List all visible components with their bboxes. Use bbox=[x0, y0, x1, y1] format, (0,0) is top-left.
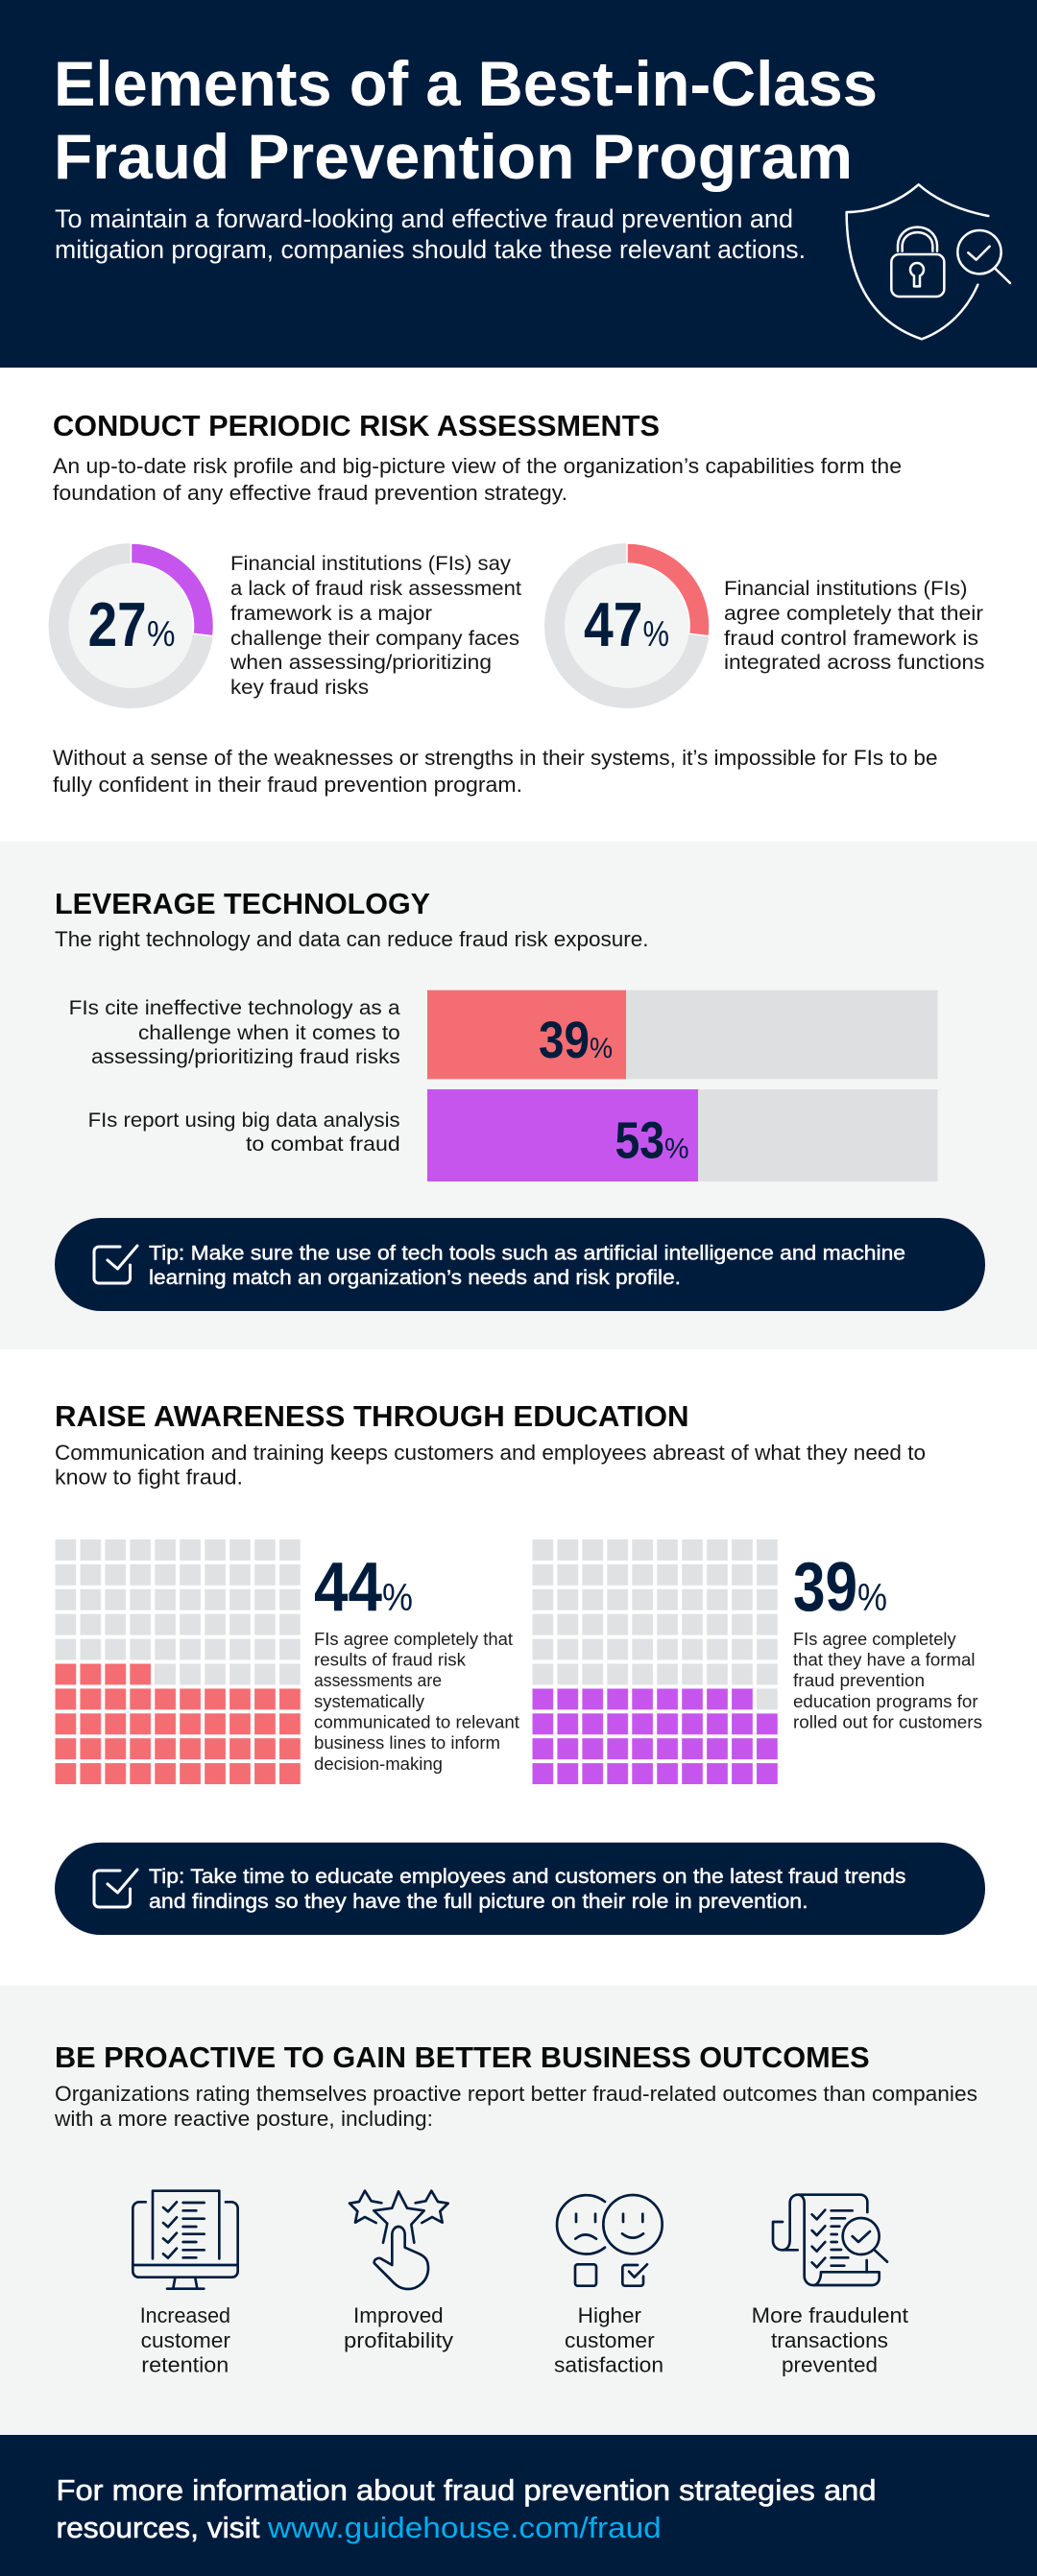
label: fraudulent transactions: More fraudulent bbox=[752, 2303, 908, 2327]
intro text: An up-to-date risk profile and big-picture view of the organization’s capabilities form the bbox=[53, 454, 902, 478]
title: Elements of a Best-in-Class bbox=[54, 48, 878, 119]
stat: 39%: 39 bbox=[793, 1549, 857, 1626]
intro text: The right technology and data can reduce fraud risk exposure. bbox=[55, 927, 649, 951]
panel: footer bbox=[0, 2435, 1037, 2576]
stat text: 39%: FIs agree completely bbox=[793, 1630, 956, 1649]
donut text: 27% bbox=[229, 552, 521, 699]
header subtitle: mitigation program, companies should take these relevant actions. bbox=[55, 235, 806, 264]
label: profitability: profitability bbox=[344, 2328, 453, 2352]
label: customer satisfaction bbox=[554, 2303, 663, 2377]
stat text: 44%: results of fraud risk bbox=[314, 1651, 467, 1670]
donut text: 27%: key fraud risks bbox=[230, 676, 369, 699]
icon: scroll with magnifier bbox=[773, 2195, 887, 2285]
label: customer satisfaction: satisfaction bbox=[554, 2353, 663, 2377]
label: customer retention: customer bbox=[141, 2328, 230, 2352]
stat text: 44%: systematically bbox=[314, 1692, 424, 1711]
header subtitle bbox=[55, 204, 806, 264]
intro text: Organizations rating themselves proactive report better fraud-related outcomes than companies bbox=[55, 2082, 977, 2106]
stat text: 44% bbox=[314, 1630, 519, 1774]
label: fraudulent transactions: transactions bbox=[771, 2328, 888, 2352]
panel: leverage technology bbox=[0, 842, 1037, 1349]
label: fraudulent transactions bbox=[752, 2303, 908, 2377]
heading: RAISE AWARENESS THROUGH EDUCATION bbox=[55, 1399, 689, 1433]
donut text: 27%: when assessing/prioritizing bbox=[229, 651, 492, 674]
donut text: 27%: a lack of fraud risk assessment bbox=[230, 577, 521, 600]
footer text: www.guidehouse.com/fraud bbox=[267, 2511, 662, 2544]
intro text: know to fight fraud. bbox=[55, 1466, 243, 1490]
stat text: 44%: assessments are bbox=[314, 1671, 442, 1690]
title: Fraud Prevention Program bbox=[54, 121, 853, 192]
stat text: 44%: communicated to relevant bbox=[314, 1713, 519, 1732]
heading: LEVERAGE TECHNOLOGY bbox=[55, 887, 430, 920]
panel: be proactive bbox=[0, 1986, 1037, 2435]
stat: 44%: 44 bbox=[314, 1549, 382, 1626]
footer text: resources, visit bbox=[56, 2511, 260, 2544]
label: fraudulent transactions: prevented bbox=[782, 2353, 878, 2377]
label: profitability: Improved bbox=[353, 2303, 444, 2327]
intro text bbox=[53, 454, 902, 505]
icon: sad and happy faces bbox=[557, 2195, 663, 2286]
heading: BE PROACTIVE TO GAIN BETTER BUSINESS OUTCOMES bbox=[55, 2040, 870, 2074]
panel: conduct periodic risk assessments bbox=[48, 409, 985, 797]
callout: technology tip: learning match an organization’s needs and risk profile. bbox=[149, 1266, 681, 1289]
stat text: 39%: education programs for bbox=[793, 1692, 978, 1711]
callout: education tip: Tip: Take time to educate employees and customers on the latest fraud trends bbox=[149, 1865, 906, 1888]
stat: 44%: % bbox=[382, 1577, 413, 1619]
intro text bbox=[55, 1441, 926, 1490]
footer text: For more information about fraud prevention strategies and bbox=[56, 2473, 876, 2507]
panel: header bbox=[0, 0, 1037, 368]
donut chart: 47%: % bbox=[643, 614, 669, 654]
callout: education tip bbox=[55, 1843, 985, 1935]
bar chart: 53% bbox=[427, 1089, 938, 1181]
stat text: 39%: that they have a formal bbox=[793, 1651, 976, 1670]
footer text bbox=[56, 2473, 876, 2544]
donut chart: 27%: 27 bbox=[88, 589, 147, 659]
donut text: 47%: Financial institutions (FIs) bbox=[724, 577, 968, 600]
callout: education tip: and findings so they have the full picture on their role in prevention. bbox=[149, 1890, 808, 1913]
callout: technology tip: Tip: Make sure the use of tech tools such as artificial intelligence and machine bbox=[149, 1242, 905, 1265]
donut text: 47% bbox=[724, 577, 985, 674]
bar chart: 53%: % bbox=[664, 1133, 689, 1165]
bar label: big data: FIs report using big data analysis bbox=[88, 1109, 400, 1132]
bar chart: 39%: 39 bbox=[539, 1012, 590, 1069]
stat text: 44%: FIs agree completely that bbox=[314, 1630, 513, 1649]
closing text: fully confident in their fraud prevention program. bbox=[53, 773, 522, 797]
label: profitability bbox=[344, 2303, 453, 2352]
closing text bbox=[53, 746, 937, 797]
donut text: 47%: integrated across functions bbox=[724, 651, 985, 674]
stat text: 44%: decision-making bbox=[314, 1754, 443, 1774]
bar chart: 53%: 53 bbox=[615, 1112, 664, 1170]
bar label: ineffective technology bbox=[69, 996, 400, 1068]
bar chart: 39%: % bbox=[590, 1033, 613, 1064]
donut text: 27%: Financial institutions (FIs) say bbox=[230, 552, 511, 575]
bar label: big data: to combat fraud bbox=[246, 1133, 400, 1156]
label: customer satisfaction: Higher bbox=[578, 2303, 641, 2327]
stat text: 44%: business lines to inform bbox=[314, 1733, 500, 1753]
stat text: 39% bbox=[793, 1630, 982, 1732]
intro text bbox=[54, 2082, 977, 2131]
waffle chart: 44% bbox=[56, 1539, 304, 1788]
stat: 39%: % bbox=[857, 1577, 887, 1619]
stat text: 39%: rolled out for customers bbox=[793, 1713, 982, 1732]
bar label: ineffective technology: challenge when it comes to bbox=[138, 1021, 400, 1044]
icon: checkbox bbox=[94, 1870, 137, 1907]
bar label: ineffective technology: FIs cite ineffective technology as a bbox=[69, 996, 400, 1019]
header subtitle: To maintain a forward-looking and effective fraud prevention and bbox=[55, 204, 793, 233]
donut chart: 27%: % bbox=[147, 614, 175, 654]
donut chart: 47% bbox=[544, 543, 710, 708]
donut text: 47%: fraud control framework is bbox=[724, 627, 978, 650]
donut text: 27%: framework is a major bbox=[230, 602, 432, 625]
bar label: big data bbox=[88, 1109, 400, 1156]
intro text: Communication and training keeps customers and employees abreast of what they need to bbox=[55, 1441, 926, 1465]
label: customer retention: Increased bbox=[140, 2303, 230, 2327]
icon: stars and pointing hand bbox=[350, 2191, 448, 2289]
donut text: 27%: challenge their company faces bbox=[230, 627, 519, 650]
icon: monitor with checklist bbox=[133, 2191, 238, 2289]
bar label: ineffective technology: assessing/prioritizing fraud risks bbox=[91, 1045, 400, 1068]
label: customer retention: retention bbox=[141, 2353, 229, 2377]
icon: checkbox bbox=[94, 1246, 137, 1283]
intro text: foundation of any effective fraud prevention strategy. bbox=[53, 481, 567, 505]
title bbox=[54, 48, 878, 192]
heading: CONDUCT PERIODIC RISK ASSESSMENTS bbox=[53, 409, 660, 442]
waffle chart: 39% bbox=[532, 1539, 782, 1788]
intro text: with a more reactive posture, including: bbox=[54, 2107, 433, 2131]
icon: shield with lock and magnifier bbox=[847, 184, 1010, 339]
label: customer retention bbox=[140, 2303, 230, 2377]
stat text: 39%: fraud prevention bbox=[793, 1671, 925, 1690]
donut chart: 27% bbox=[48, 543, 213, 708]
panel: raise awareness through education bbox=[55, 1399, 985, 1935]
bar chart: 39% bbox=[427, 990, 938, 1079]
callout: technology tip bbox=[55, 1218, 985, 1311]
label: customer satisfaction: customer bbox=[565, 2328, 655, 2352]
closing text: Without a sense of the weaknesses or strengths in their systems, it’s impossible for FIs to be bbox=[53, 746, 937, 770]
donut text: 47%: agree completely that their bbox=[724, 602, 983, 625]
donut chart: 47%: 47 bbox=[584, 589, 643, 659]
